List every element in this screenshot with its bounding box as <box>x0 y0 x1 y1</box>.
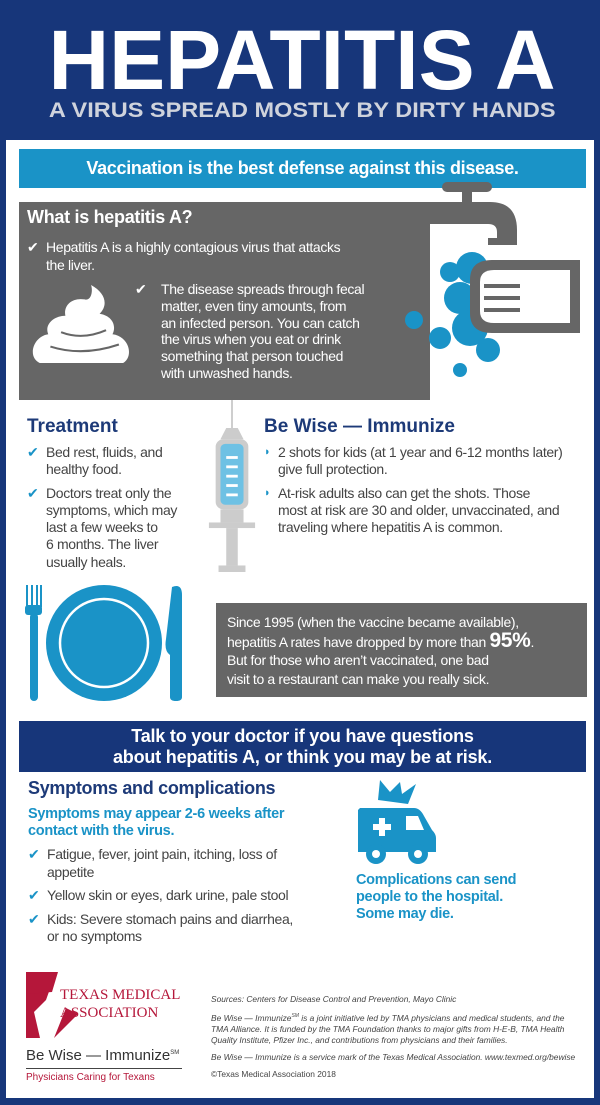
text: symptoms list: Fatigue, fever, joint pain, itching, loss of <box>47 846 277 862</box>
text: be wise list: most at risk are 30 and older, unvaccinated, and <box>278 502 559 518</box>
text: sources and credits: Be Wise — ImmunizeSM is a joint initiative led by TMA physicians and medical students, and the TMA Alliance. It is funded by the TMA Foundation thanks to major gifts from H-E-B, TMA Health Quality Institute, Pfizer Inc., and contributions from physicians and their families. <box>211 1013 564 1045</box>
text: symptoms list: Yellow skin or eyes, dark urine, pale stool <box>47 887 288 903</box>
text: be wise list: 2 shots for kids (at 1 year and 6-12 months later) <box>278 444 562 460</box>
text: bullet 2: an infected person. You can catch <box>161 315 360 331</box>
heading: treatment: Treatment <box>27 416 118 437</box>
icon: TMA star <box>26 972 77 1038</box>
text: treatment list: Bed rest, fluids, and <box>46 444 162 460</box>
text: treatment list: symptoms, which may <box>46 502 177 518</box>
icon: ambulance <box>358 780 436 864</box>
panel: what is hepatitis A <box>19 202 430 400</box>
callout: 95% stat: hepatitis A rates have dropped by more than 95%. <box>227 628 534 652</box>
text: be wise list: At-risk adults also can get the shots. Those <box>278 485 530 501</box>
callout: 95% stat: visit to a restaurant can make you really sick. <box>227 670 489 686</box>
text: symptoms list: ✔ <box>28 887 39 903</box>
text: sources and credits: ©Texas Medical Association 2018 <box>211 1069 336 1079</box>
text: symptoms list: ✔ <box>28 846 39 862</box>
banner: vaccination: Vaccination is the best defense against this disease. <box>86 158 519 178</box>
text: bullet 1: the liver. <box>46 256 95 272</box>
text: sources and credits <box>211 994 575 1079</box>
text: sources and credits: Be Wise — Immunize is a service mark of the Texas Medical Association. www.texmed.org/bewise <box>211 1052 575 1062</box>
text: bullet 2: the virus when you eat or drink <box>161 331 341 347</box>
text: complications: Complications can send <box>356 872 516 888</box>
text: symptoms list: or no symptoms <box>47 928 142 944</box>
text: be wise list: traveling where hepatitis A is common. <box>278 519 503 535</box>
text: be wise tagline: Be Wise — ImmunizeSM <box>26 1047 179 1064</box>
text: treatment list: ✔ <box>27 485 38 501</box>
text: physicians caring: Physicians Caring for Texans <box>26 1072 155 1083</box>
text: treatment list: last a few weeks to <box>46 519 158 535</box>
text: symptoms subheading: contact with the virus. <box>28 823 174 839</box>
callout: 95% stat: But for those who aren’t vaccinated, one bad <box>227 652 489 668</box>
text: symptoms list: Kids: Severe stomach pains and diarrhea, <box>47 910 293 926</box>
text: be wise list: give full protection. <box>278 461 387 477</box>
heading: be wise: Be Wise — Immunize <box>264 416 455 437</box>
banner: talk to your doctor: about hepatitis A, or think you may be at risk. <box>113 747 492 767</box>
callout: 95% stat <box>216 603 587 697</box>
title: HEPATITIS A <box>48 13 556 107</box>
text: bullet 2: The disease spreads through fecal <box>161 281 364 297</box>
text: bullet 2: matter, even tiny amounts, from <box>161 298 346 314</box>
text: bullet 2: with unwashed hands. <box>161 365 293 381</box>
callout: 95% stat: Since 1995 (when the vaccine became available), <box>227 614 519 630</box>
text: complications: Some may die. <box>356 906 454 922</box>
heading: symptoms: Symptoms and complications <box>28 778 275 798</box>
banner: vaccination <box>19 149 586 188</box>
text: treatment list <box>27 444 178 570</box>
text: TMA name: TEXAS MEDICAL <box>60 987 180 1003</box>
text: TMA name: ASSOCIATION <box>60 1005 158 1021</box>
heading: What is hepatitis A? <box>27 207 192 227</box>
banner: talk to your doctor <box>19 721 586 772</box>
icon: poop <box>32 285 129 363</box>
subtitle: A VIRUS SPREAD MOSTLY BY DIRTY HANDS <box>49 99 555 122</box>
text: symptoms list <box>28 846 293 944</box>
icon: faucet and hand <box>405 182 580 377</box>
text: symptoms subheading: Symptoms may appear 2-6 weeks after <box>28 806 284 822</box>
icon: plate with fork and knife <box>25 585 182 701</box>
text: symptoms list: appetite <box>47 864 94 880</box>
text: treatment list: healthy food. <box>46 461 122 477</box>
text: complications: people to the hospital. <box>356 889 503 905</box>
icon: syringe <box>209 400 255 572</box>
text: bullet 2: something that person touched <box>161 348 343 364</box>
banner: talk to your doctor: Talk to your doctor if you have questions <box>131 726 474 746</box>
text: bullet 2 <box>136 281 364 381</box>
text: TMA name <box>60 987 180 1021</box>
text: symptoms subheading <box>28 806 284 839</box>
logo: Texas Medical Association <box>26 972 182 1083</box>
text: treatment list: Doctors treat only the <box>46 485 171 501</box>
text: be wise list <box>264 444 562 535</box>
text: complications <box>356 872 516 922</box>
text: treatment list: usually heals. <box>46 554 126 570</box>
text: treatment list: 6 months. The liver <box>46 536 158 552</box>
text: symptoms list: ✔ <box>28 910 39 926</box>
text: treatment list: ✔ <box>27 444 38 460</box>
text: bullet 1: Hepatitis A is a highly contagious virus that attacks <box>46 239 340 255</box>
text: sources and credits: Sources: Centers for Disease Control and Prevention, Mayo Clinic <box>211 994 456 1004</box>
text: be wise list: ◗ <box>264 487 270 499</box>
text: bullet 1 <box>28 239 340 272</box>
text: be wise list: ◗ <box>264 446 270 458</box>
